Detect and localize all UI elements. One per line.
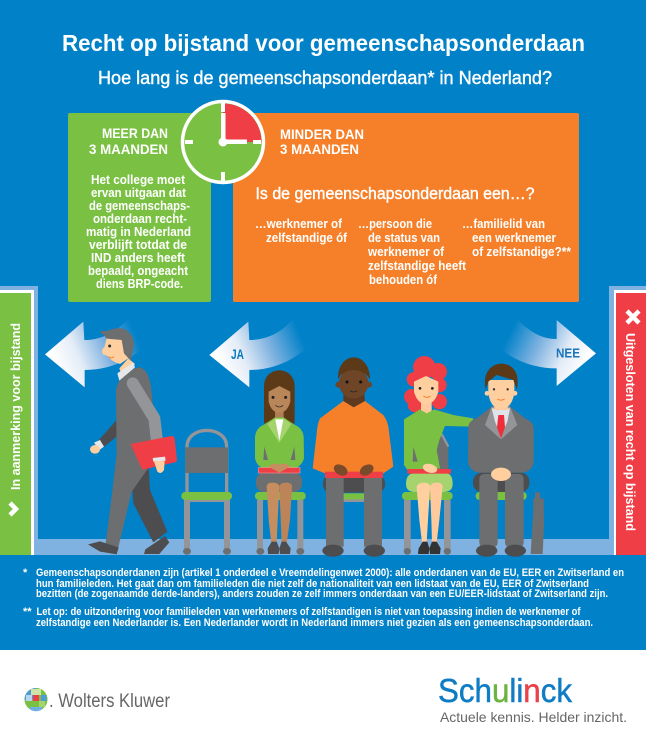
option: persoon: werknemer of: [367, 245, 445, 259]
text block: college: bepaald, ongeacht: [88, 264, 189, 278]
figure: seated man orange sweater: [313, 357, 393, 557]
label: nee: NEE: [556, 346, 580, 361]
footnotes: [23, 567, 624, 629]
icon: cross: [627, 311, 639, 323]
text block: college: onderdaan recht-: [93, 212, 187, 226]
text block: college: [86, 173, 191, 291]
text block: college: matig in Nederland: [86, 225, 191, 239]
icon: clock: [182, 102, 264, 182]
option: persoon: behouden óf: [369, 273, 438, 287]
footnote 1: [23, 567, 624, 600]
logo: Schulinck: Schulinck: [438, 672, 572, 709]
icon: bag: [531, 492, 544, 554]
footnote 2: **: [23, 606, 32, 618]
option: persoon: [358, 217, 467, 287]
logo: Schulinck: [438, 672, 627, 725]
panel: less than 3 months: [233, 113, 579, 302]
heading: meer dan 3 maanden: MEER DAN: [102, 125, 168, 141]
panel: excluded band: [614, 290, 646, 555]
text block: college: diens BRP-code.: [96, 277, 183, 291]
option: werknemer: …werknemer of: [255, 217, 343, 231]
text block: college: de gemeenschaps-: [89, 199, 190, 213]
tagline: Actuele kennis. Helder inzicht.: [440, 709, 627, 725]
icon: chevron: [10, 503, 16, 515]
option: familielid: een werknemer: [472, 231, 556, 245]
heading: minder dan 3 maanden: MINDER DAN: [280, 126, 364, 142]
heading: minder dan 3 maanden: 3 MAANDEN: [280, 141, 359, 157]
heading: meer dan 3 maanden: 3 MAANDEN: [89, 141, 168, 157]
panel: eligible band: [0, 290, 34, 555]
arrow: far left: [45, 318, 155, 387]
logo: Wolters Kluwer: [24, 688, 171, 712]
footnote 1: *: [23, 567, 28, 579]
figure: seated man grey suit: [468, 364, 534, 557]
heading: meer dan 3 maanden: [89, 125, 168, 157]
option: familielid: [462, 217, 571, 259]
text block: college: Het college moet: [91, 173, 186, 187]
question: Is de gemeenschapsonderdaan een…?: [256, 185, 534, 203]
icon: empty chair: [181, 430, 232, 555]
logo: Wolters Kluwer: . Wolters Kluwer: [49, 691, 171, 712]
text block: college: ervan uitgaan dat: [91, 186, 187, 200]
scene right: arrow, seated people, bag: [313, 315, 596, 557]
option: persoon: zelfstandige heeft: [368, 259, 467, 273]
option: werknemer: zelfstandige óf: [266, 231, 348, 245]
title: Recht op bijstand voor gemeenschapsonderdaan: [62, 30, 585, 56]
footnote 2: [23, 606, 593, 629]
arrow: nee: [490, 315, 596, 386]
option: familielid: …familielid van: [462, 217, 545, 231]
figure: seated woman brown hair: [255, 370, 306, 555]
option: familielid: of zelfstandige?**: [472, 245, 571, 259]
scene left: arrows, walking man, empty chair, seated woman: [45, 318, 320, 555]
figure: walking man: [88, 328, 177, 554]
text block: college: verblijft totdat de: [89, 238, 187, 252]
icon: globe: [24, 688, 48, 711]
floor and frame: [0, 286, 646, 555]
option: persoon: …persoon die: [358, 217, 432, 231]
option: werknemer: [255, 217, 348, 245]
subtitle: Hoe lang is de gemeenschapsonderdaan* in Nederland?: [98, 67, 552, 88]
band label: Uitgesloten van recht op bijstand: [623, 333, 638, 531]
option: persoon: de status van: [368, 231, 440, 245]
label: ja: JA: [231, 346, 244, 362]
band label: In aanmerking voor bijstand: [8, 323, 23, 490]
arrow: ja: [209, 318, 320, 387]
heading: minder dan 3 maanden: [280, 126, 364, 157]
panel: more than 3 months: [68, 113, 211, 302]
text block: college: IND anders heeft: [91, 251, 186, 265]
figure: seated woman red hair: [402, 356, 473, 555]
